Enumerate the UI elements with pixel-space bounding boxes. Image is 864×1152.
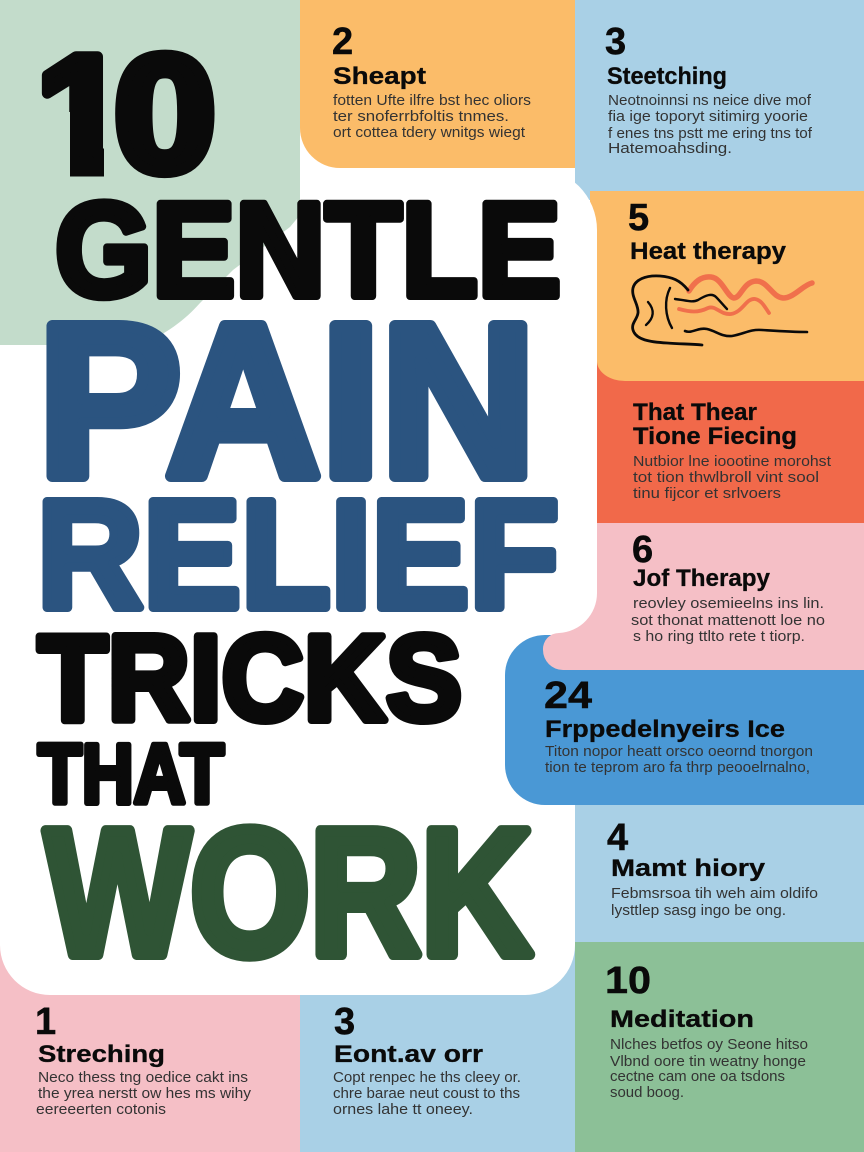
panel: stretching tip (light blue, top right): 3 (605, 21, 626, 63)
panel: that thear (red-orange): That Thear (633, 399, 757, 426)
panel: ice tip (blue): Frppedelnyeirs Ice (545, 716, 785, 743)
panel: bottom centre tip (light blue): Copt renpec he ths cleey or. (333, 1069, 521, 1086)
title line: RELIEF: RELIEF (37, 468, 559, 640)
panel: bottom stretching tip (pink): Neco thess tng oedice cakt ins (38, 1069, 248, 1086)
panel: bottom stretching tip (pink): Streching (38, 1041, 165, 1068)
panel: ice tip (blue): tion te teprom aro fa thrp peooelrnalno, (545, 759, 810, 776)
title line: WORK: WORK (45, 792, 532, 994)
icon: heat waves over body (633, 276, 812, 345)
title (36, 22, 561, 994)
panel: sheapt tip (orange, top): 2 (332, 21, 353, 63)
panel: therapy tip (pink): 6 (632, 529, 653, 571)
title line: THAT: THAT (38, 727, 224, 821)
panel: meditation tip (green) (575, 942, 864, 1152)
panel: corner colour block (pale green) (0, 0, 300, 345)
panel: therapy tip (pink): sot thonat mattenott loe no (631, 612, 825, 629)
panel: bottom stretching tip (pink): the yrea nerstt ow hes ms wihy (38, 1085, 252, 1102)
panel: heat therapy (orange) (590, 191, 864, 381)
panel: meditation tip (green): 10 (605, 960, 651, 1002)
panel: white title card (0, 120, 597, 995)
panel: massage tip (light blue, right): Mamt hiory (611, 855, 765, 882)
panel: ice tip (blue): Titon nopor heatt orsco oeornd tnorgon (545, 743, 813, 760)
panel: bottom centre tip (light blue): Eont.av orr (334, 1041, 484, 1068)
panel: heat therapy (orange): Heat therapy (630, 238, 786, 265)
title line: GENTLE: GENTLE (55, 176, 561, 325)
panel: ice tip (blue) (505, 635, 864, 805)
panel: stretching tip (light blue, top right) (575, 0, 864, 200)
panel: bottom centre tip (light blue) (300, 900, 575, 1152)
panel: bottom centre tip (light blue): chre barae neut coust to ths (333, 1085, 520, 1102)
panel: heat therapy (orange): 5 (628, 197, 649, 239)
panel: stretching tip (light blue, top right): Neotnoinnsi ns neice dive mof (608, 92, 812, 109)
panel: sheapt tip (orange, top): ort cottea tdery wnitgs wiegt (333, 124, 526, 141)
title line: TRICKS: TRICKS (38, 610, 462, 746)
panel: bottom stretching tip (pink): eereeerten cotonis (36, 1101, 166, 1118)
panel: stretching tip (light blue, top right): fia ige toporyt sitimirg yoorie (608, 108, 808, 125)
panel: stretching tip (light blue, top right): f enes tns pstt me ering tns tof (608, 125, 813, 142)
panel: bottom stretching tip (pink): 1 (35, 1001, 56, 1043)
panel: stretching tip (light blue, top right): Steetching (607, 63, 727, 90)
panel: meditation tip (green): cectne cam one oa tsdons (610, 1068, 785, 1085)
panel: therapy tip (pink) (543, 523, 864, 670)
panel: that thear (red-orange) (590, 340, 864, 523)
panel: stretching tip (light blue, top right): Hatemoahsding. (608, 140, 732, 157)
panel: massage tip (light blue, right): lysttlep sasg ingo be ong. (611, 902, 786, 919)
panel: that thear (red-orange): tinu fijcor et srlvoers (633, 485, 781, 502)
panel: meditation tip (green): Nlches betfos oy Seone hitso (610, 1036, 808, 1053)
panel: massage tip (light blue, right) (575, 800, 864, 943)
panel: that thear (red-orange): tot tion thwlbroll vint sool (633, 469, 819, 486)
title line: 10: 0 (114, 22, 216, 207)
title line: 10: 1 (36, 22, 128, 207)
panel: bottom centre tip (light blue): ornes lahe tt oneey. (333, 1101, 473, 1118)
panel: sheapt tip (orange, top): fotten Ufte ilfre bst hec oliors (333, 92, 531, 109)
panel: massage tip (light blue, right): Febmsrsoa tih weh aim oldifo (611, 885, 818, 902)
panel: therapy tip (pink): reovley osemieelns ins lin. (633, 595, 824, 612)
panel: meditation tip (green): Vlbnd oore tin weatny honge (610, 1053, 806, 1070)
panel: therapy tip (pink): Jof Therapy (633, 565, 770, 592)
title line: 10 (42, 50, 215, 178)
panel: that thear (red-orange): Nutbior lne ioootine morohst (633, 453, 832, 470)
title line: PAIN: PAIN (38, 280, 536, 523)
panel: therapy tip (pink): s ho ring ttlto rete t tiorp. (633, 628, 805, 645)
panel: ice tip (blue): 24 (544, 675, 592, 717)
panel: bottom stretching tip (pink) (0, 900, 300, 1152)
panel: bottom centre tip (light blue): 3 (334, 1001, 355, 1043)
panel: meditation tip (green): soud boog. (610, 1084, 684, 1101)
panel: meditation tip (green): Meditation (610, 1006, 754, 1033)
panel: sheapt tip (orange, top): ter snoferrbfoltis tnmes. (333, 108, 509, 125)
panel: sheapt tip (orange, top): Sheapt (333, 63, 426, 90)
panel: that thear (red-orange): Tione Fiecing (633, 423, 797, 450)
panel: massage tip (light blue, right): 4 (607, 817, 628, 859)
panel: sheapt tip (orange, top) (300, 0, 575, 168)
